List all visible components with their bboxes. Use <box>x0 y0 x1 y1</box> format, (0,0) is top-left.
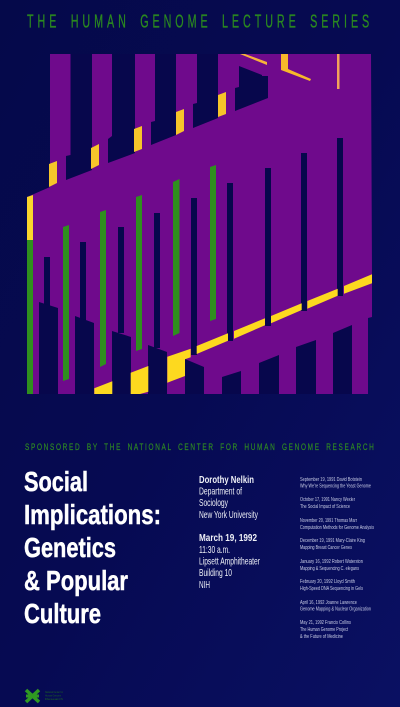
lecture schedule: April 16, 1992 Joanne Lawrence <box>300 600 357 606</box>
speaker and event details: Dorothy Nelkin <box>199 474 254 486</box>
sponsor logo text <box>45 690 63 701</box>
lecture schedule: Mapping Breast Cancer Genes <box>300 545 352 551</box>
speaker and event details <box>199 474 260 591</box>
yellow blocks upper <box>27 92 226 240</box>
lecture schedule <box>300 477 374 640</box>
speaker and event details: NIH <box>199 579 210 591</box>
green bars <box>27 165 216 394</box>
lecture schedule: January 16, 1992 Robert Waterston <box>300 559 363 565</box>
lecture schedule: September 19, 1991 David Botstein <box>300 477 362 483</box>
icon: sponsor logo <box>26 690 39 702</box>
lecture schedule: December 19, 1991 Mary-Claire King <box>300 538 365 544</box>
lecture schedule: Mapping & Sequencing C. elegans <box>300 566 359 572</box>
dark notches upper <box>66 54 268 180</box>
lecture schedule: High-Speed DNA Sequencing in Gels <box>300 586 363 592</box>
lecture title: Implications: <box>24 499 161 530</box>
series heading: THE HUMAN GENOME LECTURE SERIES <box>27 11 369 32</box>
sponsor line: SPONSORED BY THE NATIONAL CENTER FOR HUMAN GENOME RESEARCH <box>25 442 374 452</box>
sponsor logo text: National Center for <box>45 690 63 694</box>
speaker and event details: Sociology <box>199 497 228 509</box>
speaker and event details: March 19, 1992 <box>199 532 257 544</box>
yellow diagonal strip <box>94 274 372 394</box>
lecture schedule: October 17, 1991 Nancy Wexler <box>300 497 355 503</box>
purple field <box>27 54 372 394</box>
speaker and event details: Lipsett Amphitheater <box>199 556 260 568</box>
lecture schedule: February 20, 1992 Lloyd Smith <box>300 579 355 585</box>
lecture title: & Popular <box>24 565 128 596</box>
dark bars and blocks <box>39 138 352 394</box>
lecture title: Social <box>24 466 88 497</box>
speaker and event details: Building 10 <box>199 567 232 579</box>
lecture title: Culture <box>24 598 101 629</box>
lecture schedule: & the Future of Medicine <box>300 634 343 640</box>
lecture schedule: The Human Genome Project <box>300 627 348 633</box>
lecture title: Genetics <box>24 532 116 563</box>
lecture schedule: May 21, 1992 Francis Collins <box>300 620 351 626</box>
speaker and event details: New York University <box>199 509 258 521</box>
lecture schedule: November 20, 1991 Thomas Marr <box>300 518 357 524</box>
sponsor logo text: Human Genome <box>45 694 61 698</box>
speaker and event details: Department of <box>199 486 242 498</box>
abstract genome artwork <box>27 54 372 394</box>
lecture title <box>24 466 161 629</box>
orange lines <box>240 54 340 89</box>
speaker and event details: 11:30 a.m. <box>199 544 230 556</box>
sponsor logo text: Research <box>45 697 63 701</box>
lecture schedule: The Social Impact of Science <box>300 504 350 510</box>
